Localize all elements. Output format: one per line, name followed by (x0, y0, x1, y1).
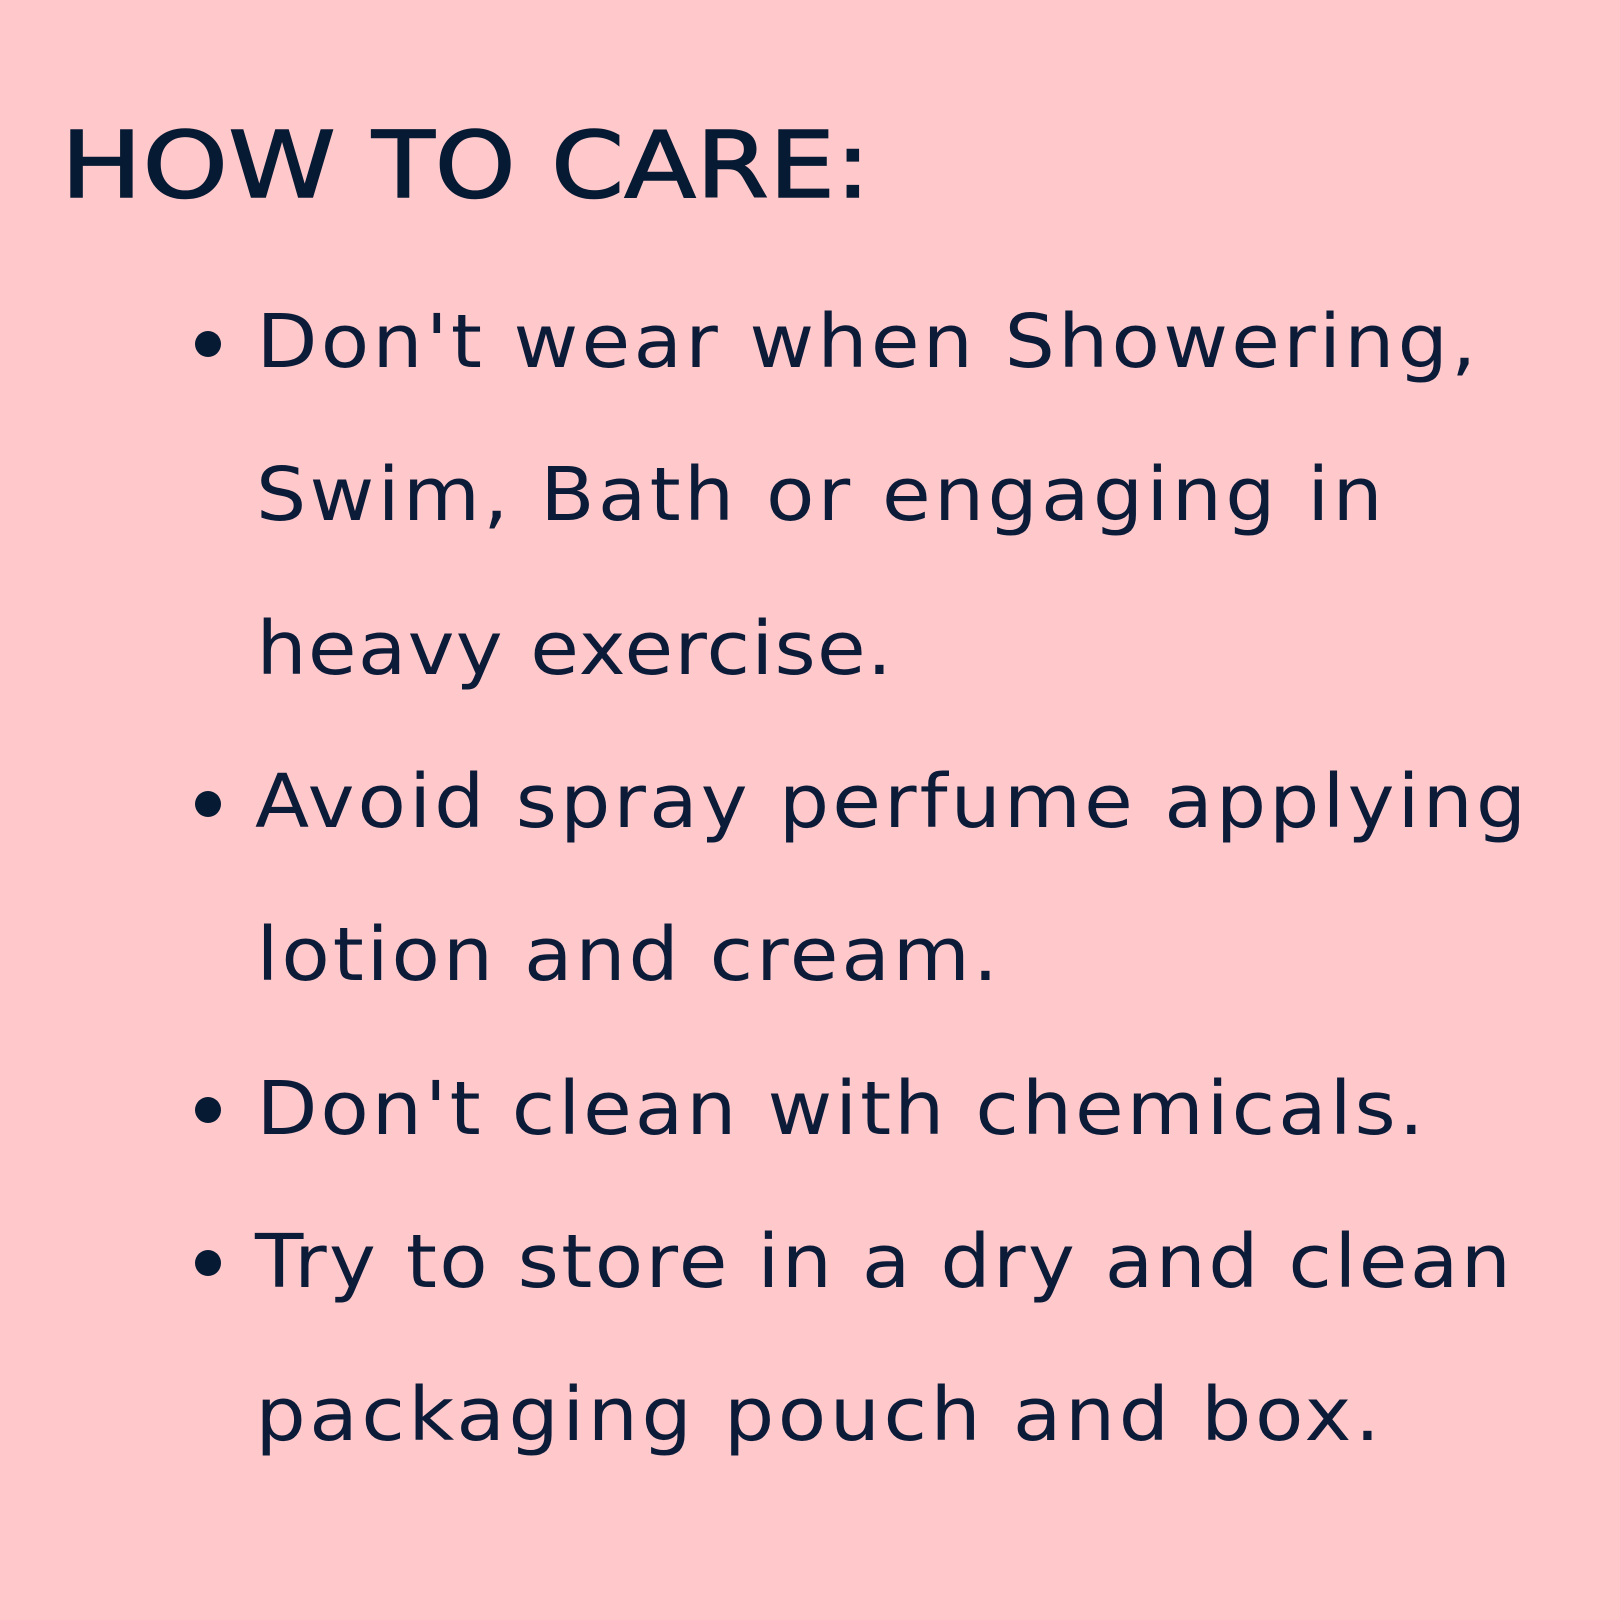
item 2 text: lotion and cream. (256, 912, 998, 998)
item 2 text (255, 759, 1526, 998)
title: TO (371, 112, 516, 219)
bullet icon (195, 1097, 221, 1123)
list item 2: perfume (195, 759, 1526, 998)
item 2 text: Avoid spray perfume applying (255, 759, 1526, 845)
item 1 text: heavy exercise. (256, 606, 892, 692)
list item 4: storage (195, 1219, 1511, 1458)
item 1 text (256, 299, 1476, 692)
title: HOW (60, 111, 336, 219)
item 1 text: Don't wear when Showering, (256, 299, 1476, 385)
title: CARE: (551, 112, 870, 219)
bullet icon (195, 791, 221, 817)
list item 3: chemicals (195, 1066, 1424, 1152)
item 4 text: Try to store in a dry and clean (254, 1219, 1511, 1305)
item 3 text: Don't clean with chemicals. (256, 1066, 1424, 1152)
list item 1: showering (195, 299, 1476, 692)
item 4 text (254, 1219, 1511, 1458)
title (60, 111, 870, 219)
item 1 text: Swim, Bath or engaging in (256, 452, 1383, 538)
bullet icon (195, 331, 221, 357)
bullet list (195, 299, 1526, 1458)
bullet icon (195, 1250, 221, 1276)
item 4 text: packaging pouch and box. (256, 1372, 1380, 1458)
